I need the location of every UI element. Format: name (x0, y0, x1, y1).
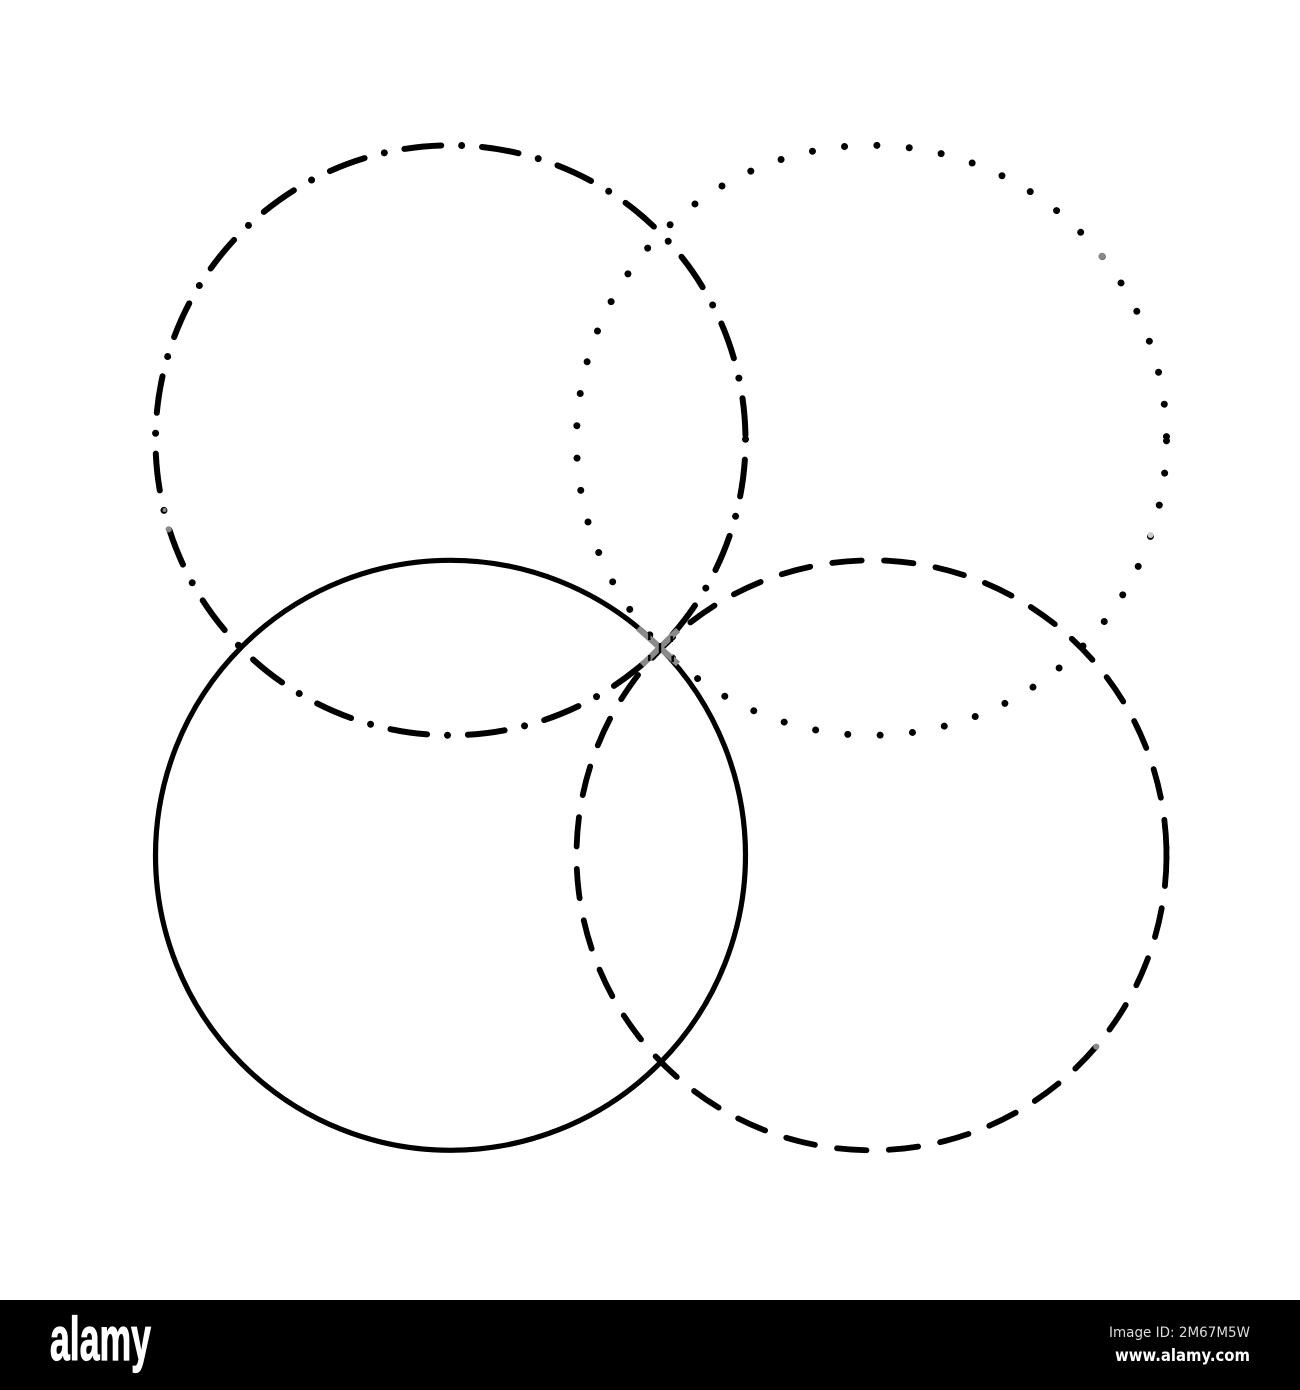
circle: solid, bottom left (156, 560, 746, 1150)
footer bar (0, 1300, 1300, 1390)
circle: dash-dot, top left (154, 144, 747, 736)
central crossing point (638, 628, 678, 665)
circle: dashed, bottom right (575, 559, 1168, 1152)
website: www.alamy.com (1115, 1346, 1250, 1366)
image id: Image ID: 2M67M5W (1109, 1325, 1250, 1341)
circle: dotted, top right (576, 145, 1167, 736)
logo: alamy: alamy (50, 1305, 151, 1373)
